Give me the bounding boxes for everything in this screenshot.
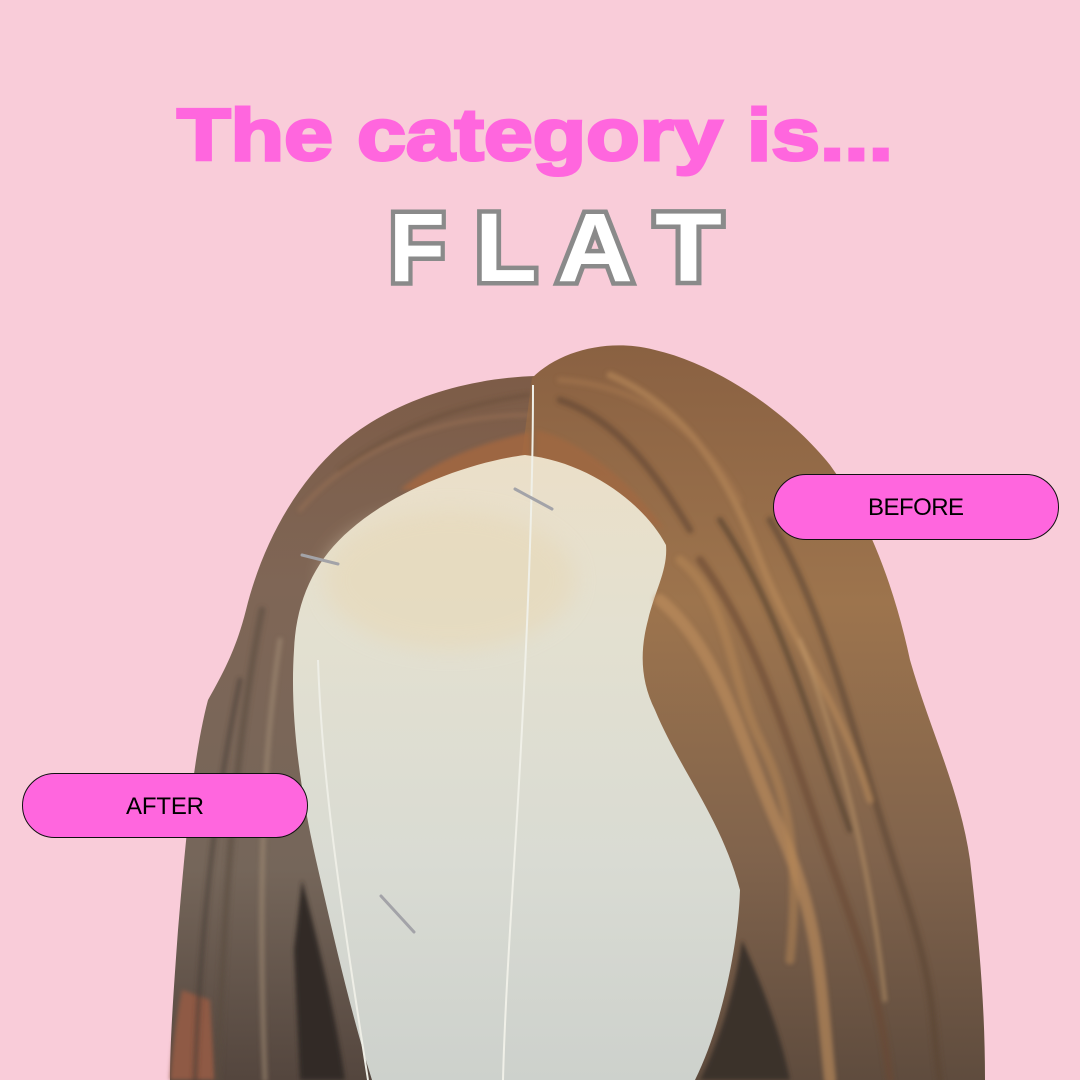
left seam [318, 660, 368, 1080]
label: before: BEFORE [868, 494, 964, 521]
hair strands [195, 375, 940, 1080]
label: before [774, 474, 1058, 540]
hair: left side [170, 376, 540, 1080]
hair: right side [520, 345, 985, 1080]
heading: FLAT: T [655, 193, 722, 302]
label: after: AFTER [126, 793, 204, 820]
wig on mannequin photo illustration [170, 345, 985, 1080]
heading: FLAT [389, 193, 722, 302]
heading: FLAT: A [557, 193, 633, 302]
heading: FLAT: L [475, 193, 537, 302]
hair: root shading [400, 432, 530, 490]
face warm patch [325, 510, 575, 650]
pins [302, 489, 552, 932]
left dark strand [294, 880, 345, 1080]
mannequin head [293, 455, 740, 1080]
label: after [22, 774, 308, 838]
right dark shadow [700, 940, 790, 1080]
hair: lower left warm tone [170, 990, 215, 1080]
title: The category is... [177, 95, 893, 176]
centre seam [503, 385, 533, 1080]
heading: FLAT: F [389, 193, 445, 302]
hair: root shading right [536, 430, 665, 530]
